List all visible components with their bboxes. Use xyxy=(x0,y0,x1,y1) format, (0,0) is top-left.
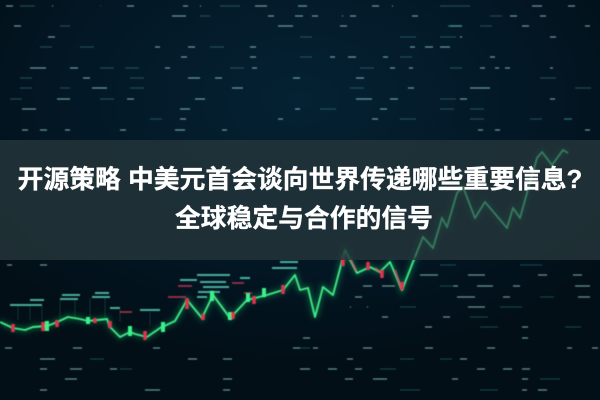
data readouts lower xyxy=(5,265,598,390)
title: 开源策略 中美元首会谈向世界传递哪些重要信息? xyxy=(18,166,582,194)
price line xyxy=(0,150,568,337)
title: 全球稳定与合作的信号 xyxy=(175,205,433,233)
price line glow xyxy=(0,150,568,337)
data clusters near chart xyxy=(10,262,298,326)
candlesticks xyxy=(13,255,402,340)
data readouts upper xyxy=(6,6,591,130)
title xyxy=(18,166,582,233)
translucent title band xyxy=(0,140,600,260)
price line highlight inside band xyxy=(415,150,568,257)
